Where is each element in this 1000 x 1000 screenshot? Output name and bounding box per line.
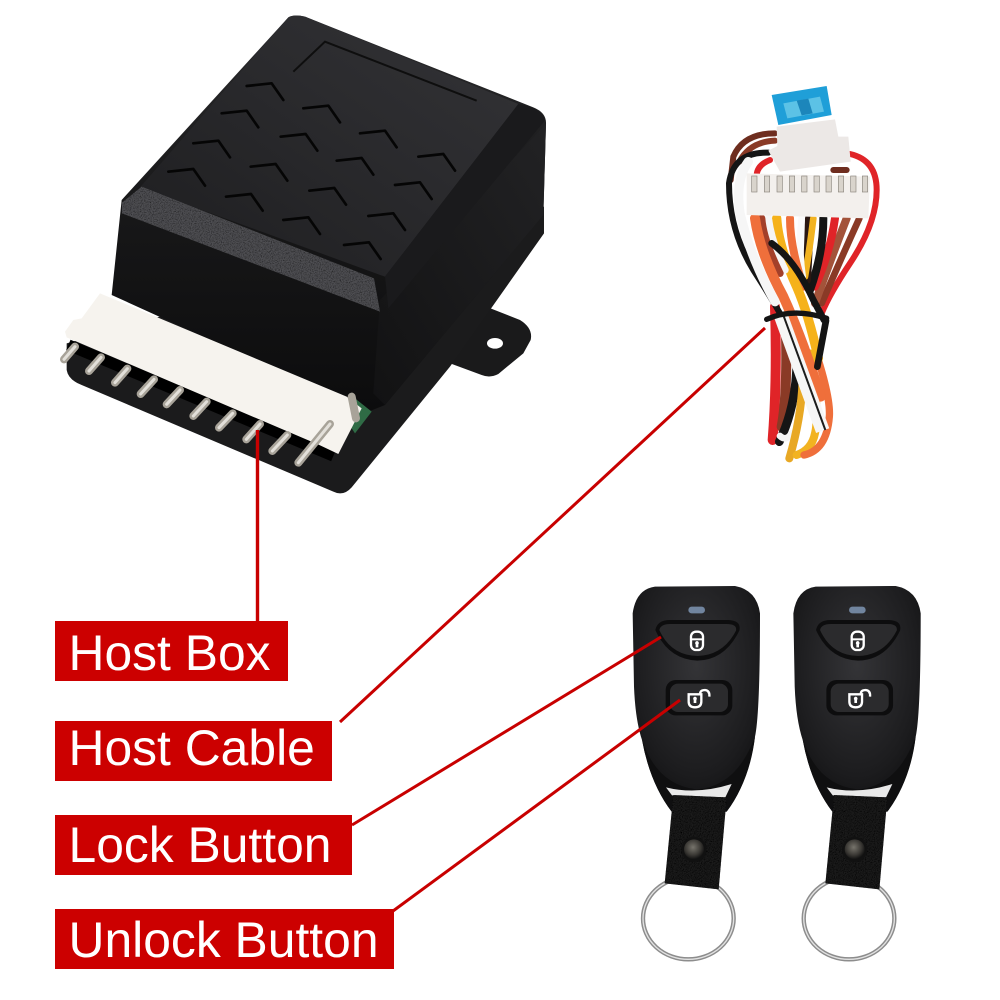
- label: Host Cable: Host Cable: [68, 720, 315, 776]
- base plate: [67, 207, 544, 493]
- shell: [112, 15, 546, 412]
- black cable ties: [767, 243, 827, 367]
- label: Host Box: Host Box: [68, 625, 271, 681]
- line: host box: [256, 430, 259, 622]
- right side face: [373, 124, 546, 405]
- white terminal connector: [65, 293, 362, 454]
- leader lines: [258, 328, 765, 911]
- white connector block: [747, 173, 870, 218]
- raised chevron marks: [168, 83, 455, 259]
- blue fuse: [772, 86, 832, 125]
- label: Lock Button: Lock Button: [68, 817, 332, 873]
- circuit board corner: [348, 398, 372, 433]
- metal pins: [64, 347, 356, 463]
- connector shadow on base: [68, 345, 333, 456]
- wires behind connector: [731, 133, 877, 313]
- fuse holder: [768, 119, 851, 172]
- line: host cable: [340, 328, 765, 722]
- mounting tab: [437, 302, 531, 376]
- label recess outline: [293, 42, 477, 101]
- remote key fob, right: [793, 586, 921, 959]
- label: Unlock Button: Unlock Button: [68, 912, 379, 968]
- connector pin slots: [752, 176, 868, 192]
- black and white wires: [729, 153, 825, 431]
- right bevel: [385, 104, 545, 308]
- textured front bevel: [122, 187, 380, 312]
- wiring harness product photo: [729, 86, 877, 458]
- host box product photo: [64, 15, 546, 493]
- wire ends below the tie: [773, 307, 829, 458]
- wire fan-out above the tie: [755, 218, 859, 397]
- line: unlock button: [393, 700, 680, 911]
- remote key fob, left: [633, 586, 760, 959]
- line: lock button: [352, 637, 661, 825]
- top face: [140, 15, 518, 277]
